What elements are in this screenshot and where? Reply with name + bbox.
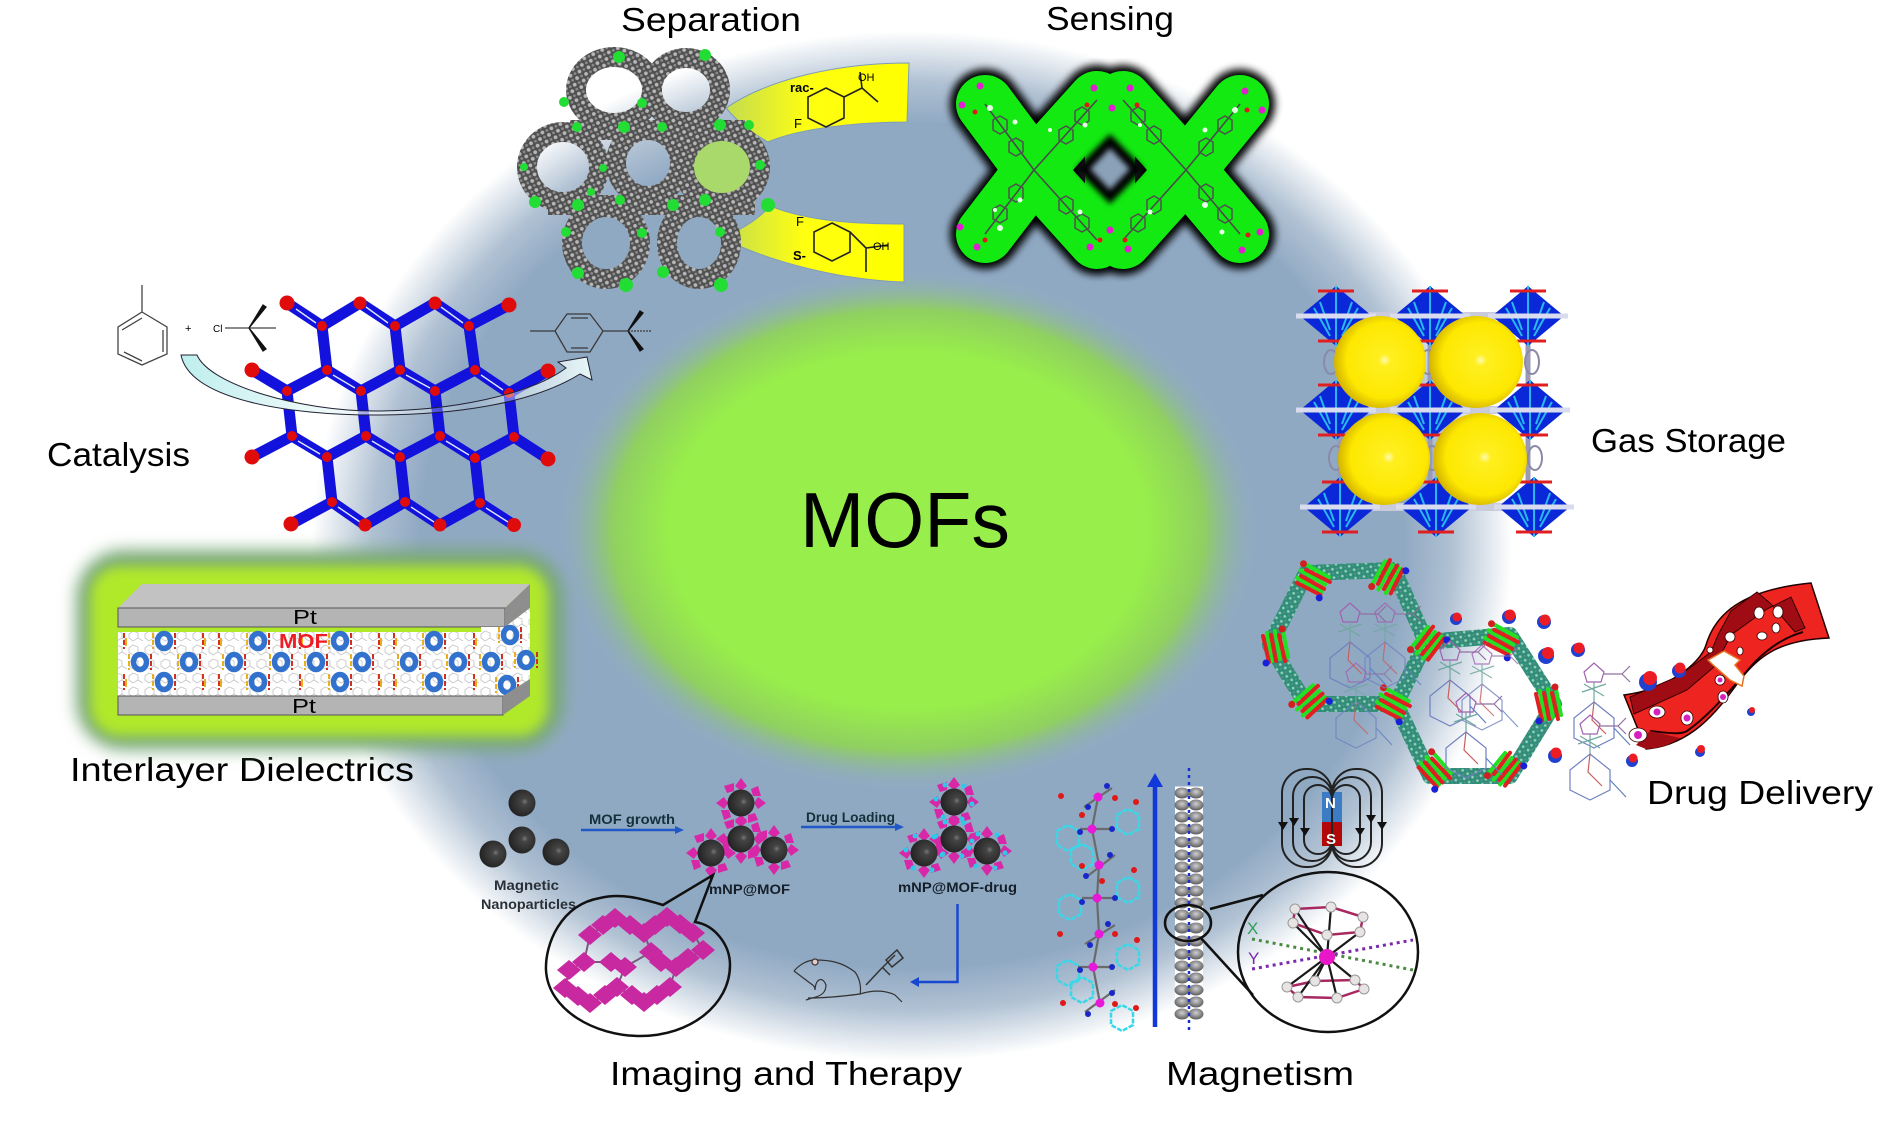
callout: MOF framework bubble	[546, 875, 730, 1036]
reactant molecules: +	[185, 323, 191, 335]
callout: magnified coordination centre	[1165, 872, 1418, 1032]
blue framework bonds	[252, 303, 548, 525]
yellow pore spheres	[1334, 316, 1527, 505]
coordination complex: X	[1247, 919, 1258, 938]
panel: Interlayer Dielectrics	[70, 550, 564, 788]
magenta framework chain	[553, 907, 715, 1013]
icon: bar magnet with field lines: N	[1325, 795, 1336, 812]
heading: Separation: Separation	[621, 1, 801, 38]
yellow enantiomer bands	[722, 63, 909, 282]
arrow: MOF growth: MOF growth	[589, 811, 675, 827]
label: Magnetic Nanoparticles: Magnetic	[494, 877, 559, 893]
porous grey framework	[527, 57, 760, 279]
top Pt slab: Pt	[293, 607, 318, 629]
mNP@MOF cluster	[686, 778, 799, 878]
heading: Gas Storage: Gas Storage	[1591, 422, 1786, 459]
bottom Pt slab	[118, 679, 530, 718]
panel: Separation	[520, 1, 909, 292]
coordination complex	[1247, 902, 1413, 1003]
MOF layer: MOF	[279, 631, 328, 653]
green atoms	[520, 49, 775, 292]
background: blue circular glow	[312, 31, 1512, 1061]
bond highlights	[296, 307, 508, 522]
upper molecule: OH	[873, 241, 890, 253]
icon: bar magnet with field lines	[1278, 769, 1387, 867]
reactant molecules: Cl	[213, 324, 222, 335]
linkers	[1324, 316, 1542, 507]
black halo	[985, 100, 1240, 240]
panel: Drug Delivery	[1262, 554, 1874, 811]
green glow	[76, 550, 564, 750]
panel: Sensing	[956, 0, 1266, 254]
panel: Catalysis	[47, 285, 652, 532]
icon: bar magnet with field lines: S	[1326, 831, 1336, 848]
heading: Magnetism: Magnetism	[1166, 1055, 1354, 1092]
label: Magnetic Nanoparticles: Nanoparticles	[481, 896, 576, 912]
icon: mouse with syringe	[794, 950, 903, 1002]
red nodes	[244, 296, 556, 532]
heading: Imaging and Therapy: Imaging and Therapy	[610, 1055, 963, 1092]
arrow: chain axis	[1147, 773, 1163, 1027]
reactant molecules	[118, 285, 276, 365]
panel: Imaging and Therapy	[480, 777, 1017, 1092]
drug molecules	[1330, 603, 1630, 800]
curved reaction arrow	[181, 355, 592, 415]
product molecule	[530, 311, 652, 352]
left coordination chain	[1057, 783, 1140, 1031]
panel: Gas Storage	[1296, 286, 1786, 537]
upper molecule: S-	[793, 248, 806, 263]
blood vessel	[1624, 583, 1829, 749]
label: mNP@MOF: mNP@MOF	[709, 881, 790, 897]
central green glow	[556, 268, 1260, 792]
heading: Catalysis: Catalysis	[47, 436, 190, 473]
upper molecule	[790, 72, 890, 272]
label: mNP@MOF-drug: mNP@MOF-drug	[898, 879, 1017, 895]
coordination complex: Y	[1248, 949, 1259, 968]
panel: Magnetism	[1057, 768, 1418, 1092]
heading: Interlayer Dielectrics: Interlayer Dielectrics	[70, 751, 414, 788]
heading: Sensing: Sensing	[1046, 0, 1174, 37]
central pore	[1076, 134, 1144, 204]
green X shape	[985, 95, 1240, 245]
arrow: Drug Loading: Drug Loading	[806, 809, 895, 825]
heading: Drug Delivery: Drug Delivery	[1647, 774, 1874, 811]
hexagonal framework	[1270, 570, 1554, 776]
metal clusters	[1296, 286, 1574, 537]
molecular backbone	[956, 82, 1266, 254]
upper molecule: F	[796, 214, 804, 229]
MOF layer	[118, 608, 537, 696]
framework corner clusters	[1262, 554, 1561, 794]
upper molecule: F	[794, 116, 802, 131]
arrow: MOF growth	[581, 811, 684, 834]
mNP@MOF-drug cluster	[899, 777, 1012, 878]
arrow: Drug Loading	[801, 809, 904, 831]
title: MOFs: MOFs	[800, 476, 1010, 564]
label: Magnetic Nanoparticles	[481, 877, 576, 912]
sphere column	[1174, 768, 1204, 1030]
bright green glow core	[90, 566, 548, 736]
upper molecule: OH	[858, 72, 875, 84]
arrow: injection	[910, 904, 958, 987]
upper molecule: rac-	[790, 80, 814, 95]
magnetic nanoparticles	[480, 790, 570, 868]
bottom Pt slab: Pt	[292, 696, 317, 718]
red and blue drug particles	[1450, 610, 1755, 767]
top Pt slab	[118, 584, 530, 629]
